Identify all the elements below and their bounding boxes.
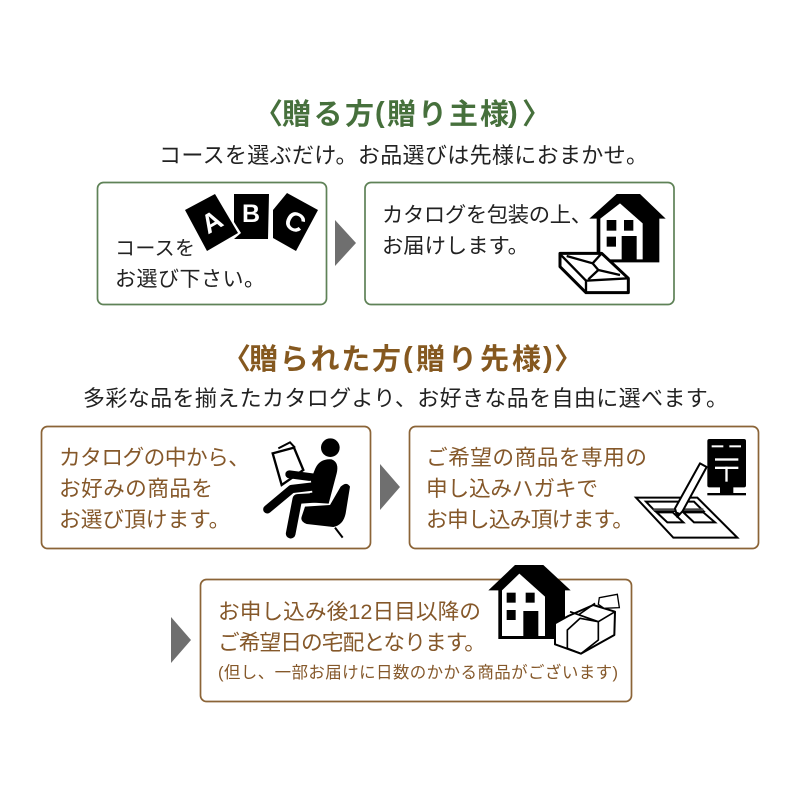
heading: recipient: 贈られた方 [249,343,401,376]
text: choose a course: お選び下さい。 [115,268,265,291]
text: browse catalog: お選び頂けます。 [59,507,230,532]
text: catalog delivered: お届けします。 [382,234,529,258]
heading: giver: 〉 [522,99,551,131]
icon: house and wrapped box [560,194,666,293]
icon: ABC cards: B [242,200,260,228]
text: choose a course: コースを [115,238,195,260]
subheading: recipient: 多彩な品を揃えたカタログより、お好きな品を自由に選べます。 [83,386,728,411]
heading: recipient: 〈 [222,344,251,376]
text: apply by postcard: お申し込み頂けます。 [426,507,634,532]
heading: recipient: ) [543,342,553,374]
text: delivery date: ご希望日の宅配となります。 [218,630,486,655]
text: apply by postcard [426,445,647,532]
panel: choose a course [98,182,326,304]
heading: giver: 贈り主様 [387,98,509,131]
panel: apply by postcard [410,426,758,548]
icon: house and gift box [488,565,619,654]
text: delivery date: お申し込み後12日目以降の [218,599,481,624]
text: browse catalog: カタログの中から、 [59,445,250,470]
text: apply by postcard: ご希望の商品を専用の [426,445,647,470]
subheading: giver: コースを選ぶだけ。お品選びは先様におまかせ。 [159,143,648,168]
heading: giver: 贈る方 [282,98,374,131]
icon: person reading in chair [267,438,350,538]
text: delivery date: (但し、一部お届けに日数のかかる商品がございます) [218,662,618,682]
text: delivery date [218,599,618,682]
heading: recipient: 贈り先様 [416,343,541,376]
text: choose a course [115,238,265,291]
panel: browse catalog [42,426,370,548]
heading: giver: ) [508,97,518,129]
heading: giver [254,97,551,131]
panel: delivery date [200,565,632,702]
heading: giver: 〈 [254,99,283,131]
heading: recipient [222,342,583,376]
icon: postbox and postcard [636,439,746,538]
text: catalog delivered: カタログを包装の上、 [382,203,592,227]
icon: ABC cards: C [279,204,311,240]
heading: recipient: ( [403,342,413,374]
icon: ABC cards: A [196,204,228,240]
arrow: recipient step 1 [380,464,400,510]
panel: catalog delivered [365,182,674,304]
heading: recipient: 〉 [554,344,583,376]
text: browse catalog [59,445,250,532]
arrow: recipient step 2 [171,617,191,663]
text: catalog delivered [382,203,592,258]
text: browse catalog: お好みの商品を [59,476,213,501]
arrow: giver step [335,220,356,266]
text: apply by postcard: 申し込みハガキで [426,476,598,501]
icon: ABC cards [185,193,318,251]
heading: giver: ( [375,97,385,129]
